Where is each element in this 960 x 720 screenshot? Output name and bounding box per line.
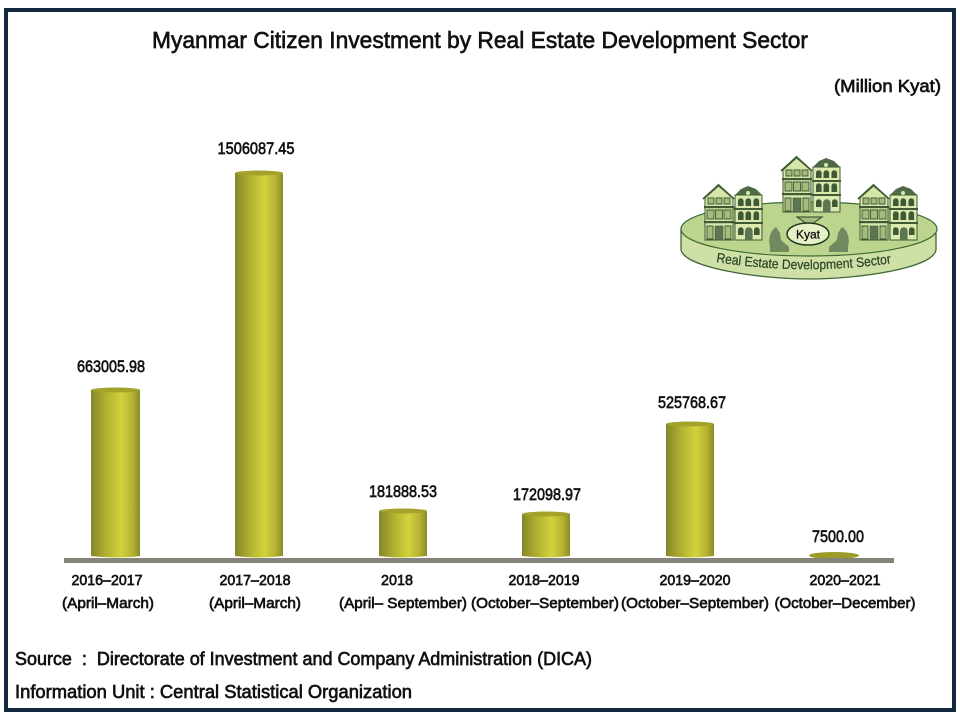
value labels: 172098.97 (513, 486, 581, 504)
illustration: real estate platform: Real Estate Development Sector (716, 252, 890, 272)
bar: 2017–2018 (235, 170, 283, 558)
category labels: 2017–2018 (220, 573, 290, 589)
category labels: (October–September) (621, 596, 769, 612)
category labels: 2020–2021 (810, 573, 880, 589)
value labels: 181888.53 (369, 483, 437, 501)
bar: 2016–2017 (91, 388, 140, 558)
category labels: 2018 (381, 573, 413, 589)
category labels: 2018–2019 (508, 573, 580, 589)
bar: 2018–2019 (522, 512, 570, 558)
unit label: (Million Kyat) (834, 76, 941, 96)
value labels: 7500.00 (812, 528, 864, 546)
information unit note: Information Unit : Central Statistical Organization (15, 682, 412, 702)
source note: Source : Directorate of Investment and Company Administration (DICA) (15, 649, 592, 669)
value labels (77, 140, 864, 546)
bar: 2018 (379, 508, 427, 558)
bar: 2019–2020 (666, 422, 714, 558)
value labels: 663005.98 (77, 358, 145, 376)
value labels: 525768.67 (658, 394, 726, 412)
bar chart (62, 140, 916, 612)
category labels: (October–December) (774, 596, 916, 612)
title: Myanmar Citizen Investment by Real Estate Development Sector (152, 27, 808, 53)
category labels: (April– September) (339, 596, 467, 612)
axis line (64, 558, 894, 563)
category labels: 2016–2017 (72, 573, 142, 589)
illustration: real estate platform (680, 156, 938, 280)
category labels: 2019–2020 (660, 573, 730, 589)
category labels: (April–March) (62, 596, 154, 612)
bar: 2020–2021 (809, 552, 859, 559)
illustration: real estate platform: Kyat (796, 228, 821, 242)
category labels (62, 573, 916, 612)
value labels: 1506087.45 (218, 140, 294, 158)
category labels: (October–September) (471, 596, 619, 612)
category labels: (April–March) (209, 596, 301, 612)
